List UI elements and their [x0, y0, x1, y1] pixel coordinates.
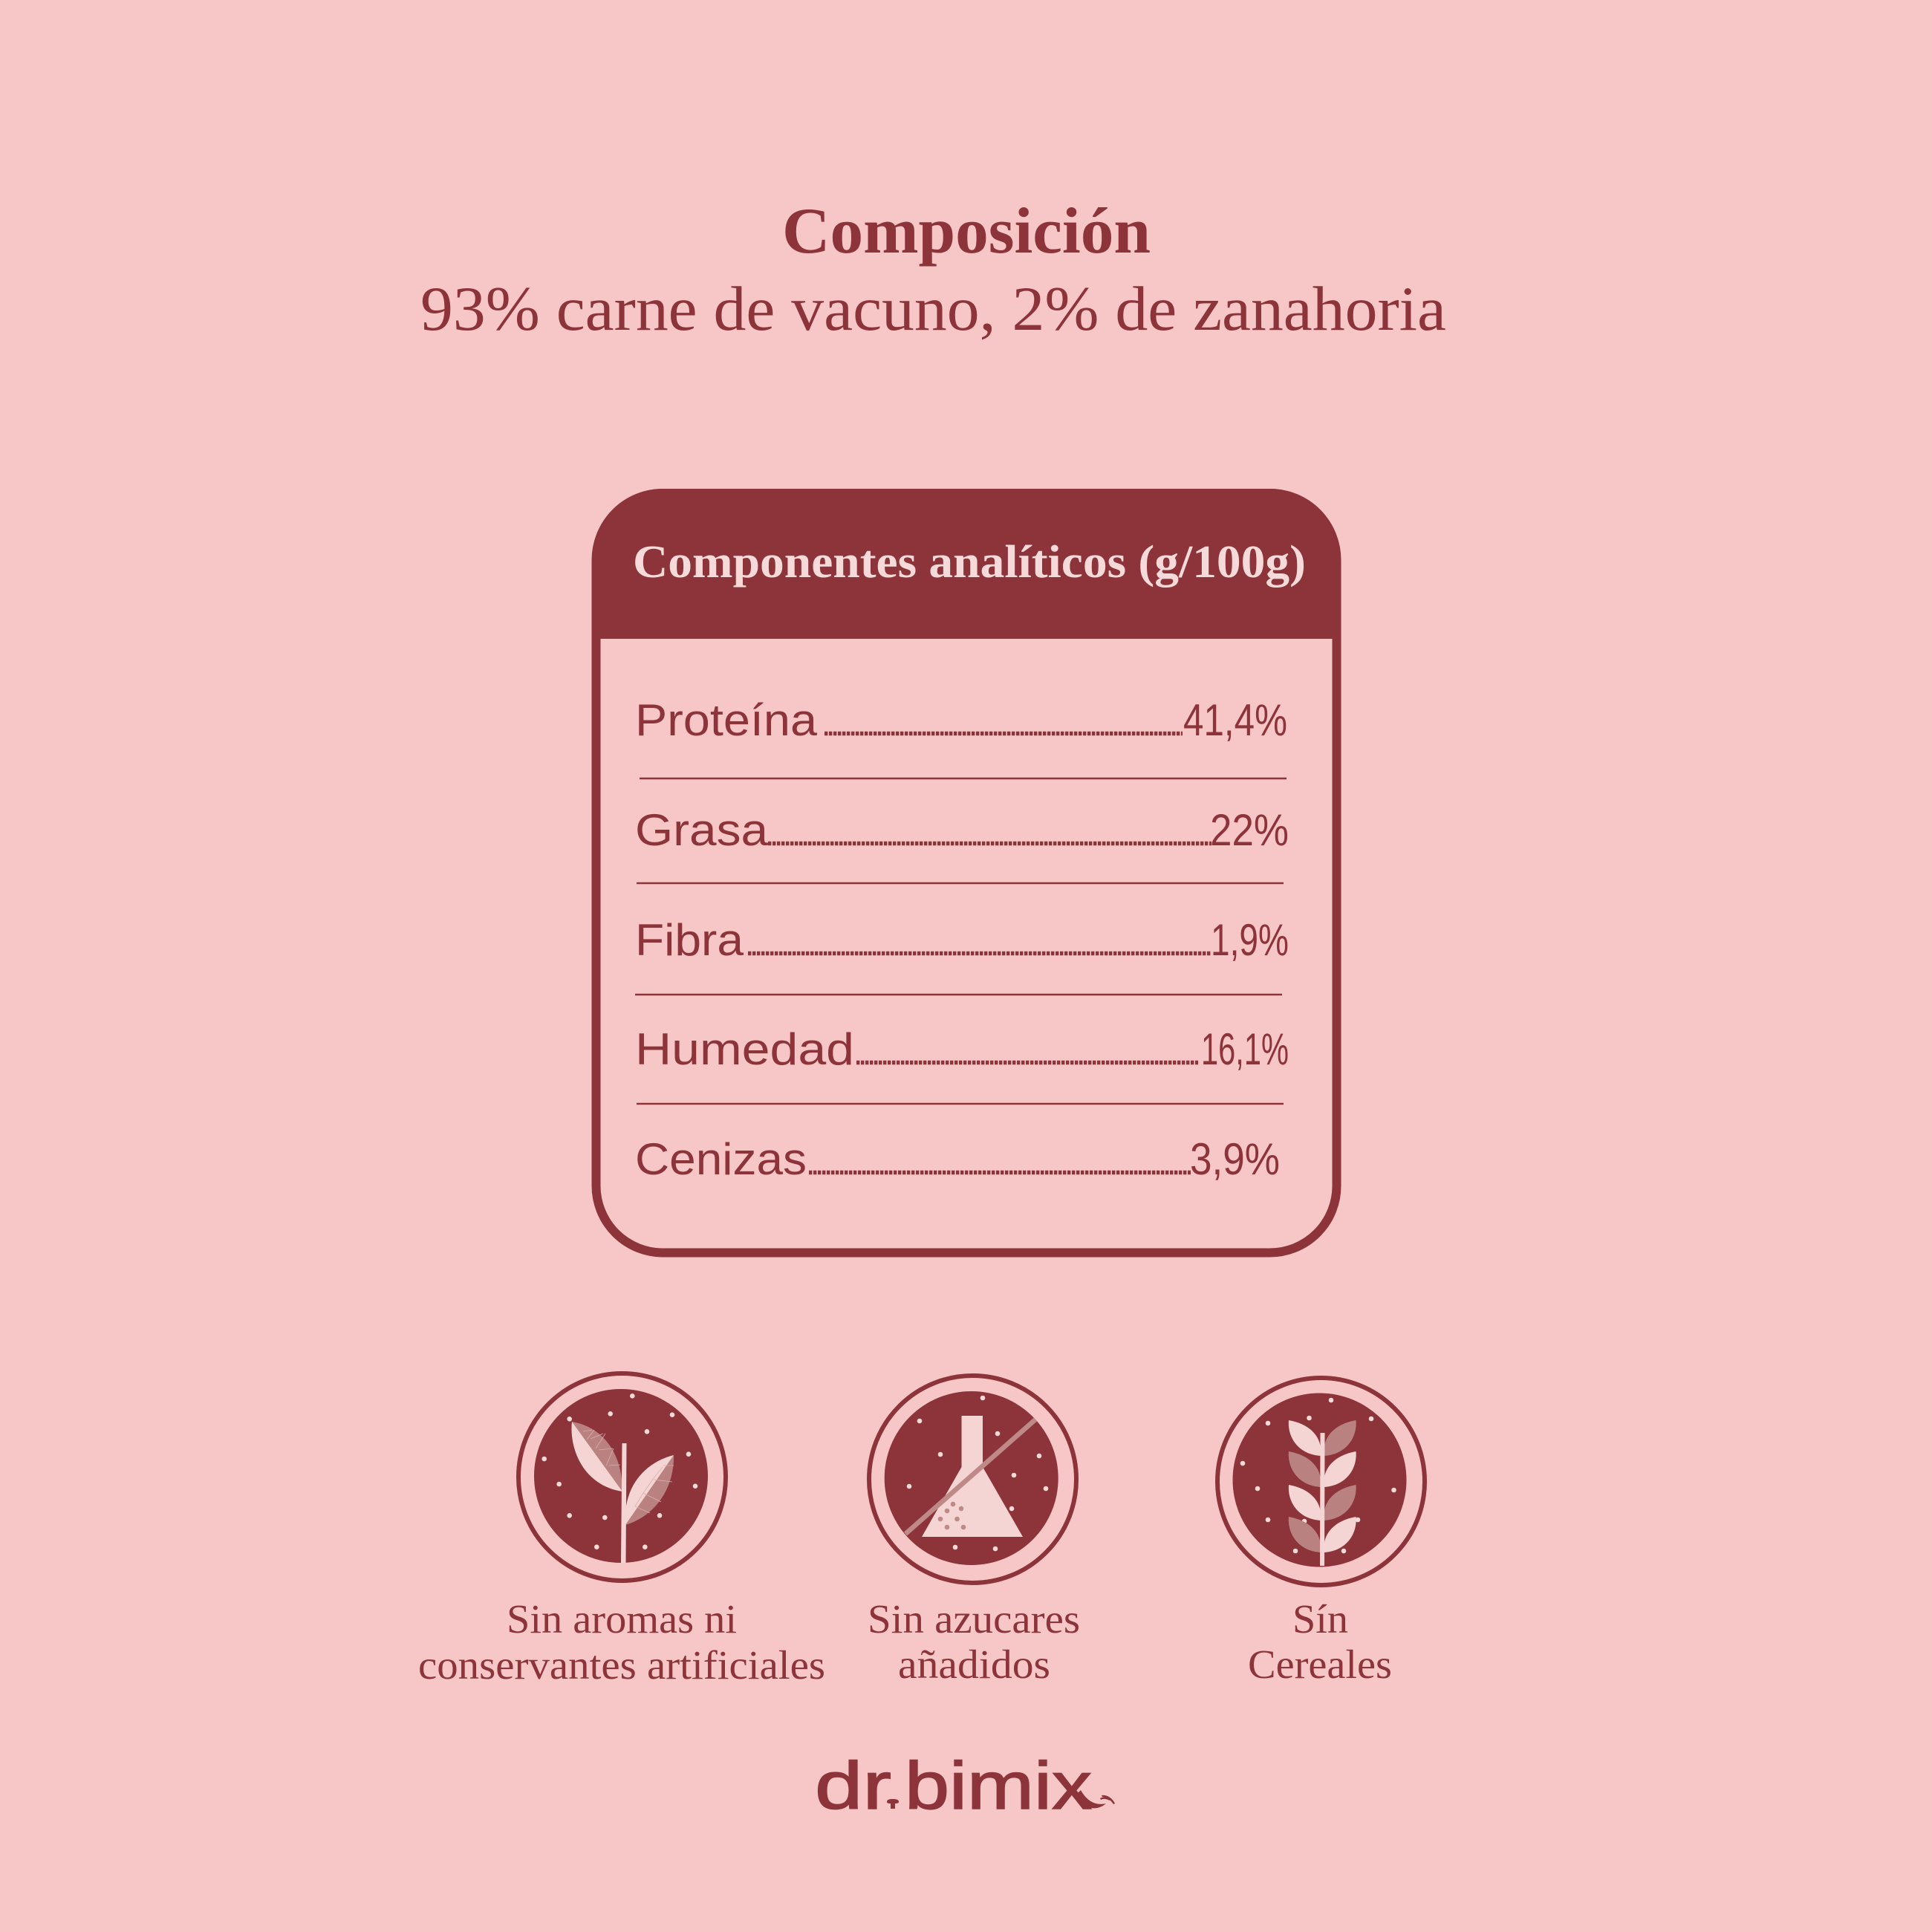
logo: dr.bimix: bimix — [905, 1749, 1092, 1824]
icon: wheat stalk (no cereals) — [1217, 1378, 1425, 1585]
icon: logo mushroom dot — [887, 1799, 899, 1809]
panel: analytical components card — [592, 489, 1341, 1252]
logo tail swoosh — [1075, 1790, 1115, 1808]
icon: crossed-out flask (no added sugars) — [869, 1376, 1076, 1583]
row: Grasa: Grasa — [635, 805, 769, 855]
row: Fibra: 1,9% — [1211, 915, 1289, 965]
subtitle: composition percentages: 93% carne de vacuno, 2% de zanahoria — [420, 274, 1446, 344]
label: no added sugars: añadidos — [898, 1642, 1050, 1687]
label: no aromas or preservatives: conservantes artificiales — [418, 1642, 825, 1688]
card outline — [596, 493, 1337, 1252]
row: Fibra: Fibra — [635, 915, 744, 965]
card header band — [592, 489, 1341, 639]
card heading: Componentes analíticos (g/100g) — [633, 537, 1306, 588]
logo: dr.bimix: dr — [815, 1749, 891, 1824]
label: no aromas or preservatives — [418, 1596, 825, 1688]
title: Composición: Composición — [782, 195, 1151, 267]
row: Proteína — [635, 695, 1287, 745]
label: no aromas or preservatives: Sin aromas ni — [507, 1596, 737, 1642]
row: Cenizas: 3,9% — [1190, 1134, 1280, 1184]
row: Proteína: 41,4% — [1183, 695, 1287, 745]
logo: dr.bimix — [815, 1749, 1115, 1824]
row: Fibra — [635, 915, 1289, 965]
row: Grasa: 22% — [1210, 805, 1289, 855]
label: no added sugars — [868, 1596, 1080, 1687]
row: Cenizas — [635, 1134, 1280, 1184]
label: no added sugars: Sin azucares — [868, 1596, 1080, 1642]
logo: dr.bimix: . — [887, 1769, 899, 1818]
row: Humedad: Humedad — [635, 1024, 854, 1074]
label: no cereals: Sín — [1292, 1596, 1348, 1642]
row: Grasa — [635, 805, 1289, 855]
row: Cenizas: Cenizas — [635, 1134, 807, 1184]
row: Humedad — [635, 1024, 1289, 1074]
icon: plant with leaves (no artificial aromas) — [518, 1373, 726, 1581]
row: Proteína: Proteína — [635, 695, 818, 745]
label: no cereals — [1248, 1596, 1392, 1687]
label: no cereals: Cereales — [1248, 1642, 1392, 1687]
row: Humedad: 16,1% — [1201, 1024, 1289, 1074]
